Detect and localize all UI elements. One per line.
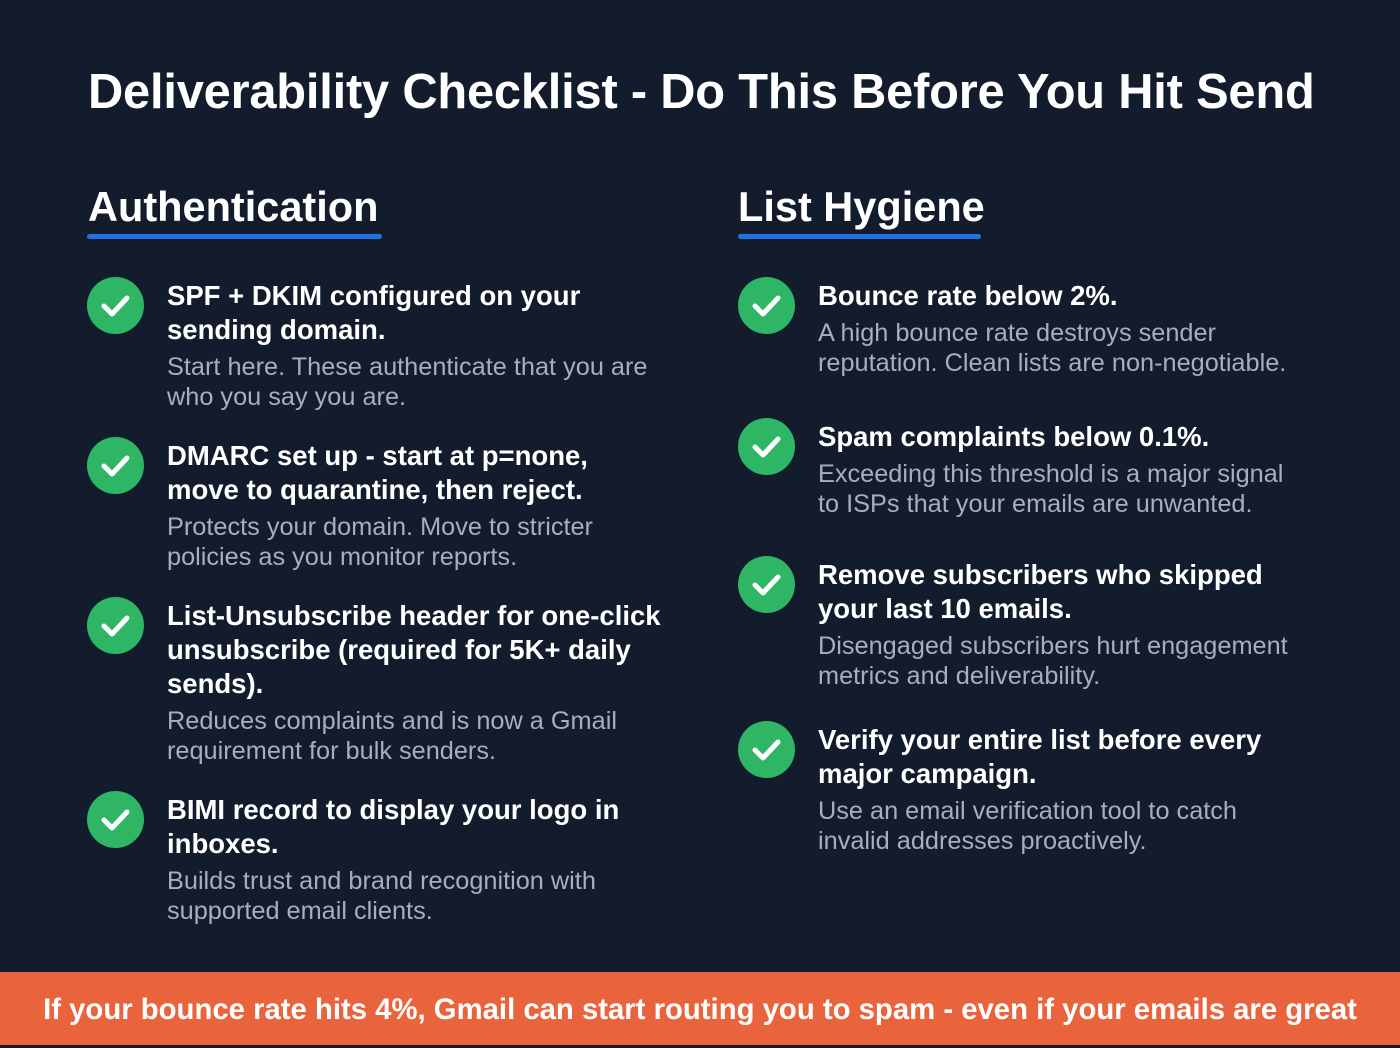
item: remove subscribers: metrics and deliverability. bbox=[818, 662, 1100, 690]
item: bounce rate: reputation. Clean lists are non-negotiable. bbox=[818, 349, 1286, 377]
item: verify list: invalid addresses proactively. bbox=[818, 827, 1147, 855]
item: verify list bbox=[738, 721, 1262, 855]
item: BIMI: inboxes. bbox=[167, 828, 279, 859]
heading: authentication: Authentication bbox=[88, 183, 378, 230]
item: DMARC: policies as you monitor reports. bbox=[167, 543, 517, 571]
item: List-Unsubscribe: Reduces complaints and is now a Gmail bbox=[167, 707, 617, 735]
item: DMARC: Protects your domain. Move to stricter bbox=[167, 513, 593, 541]
item: DMARC: DMARC set up - start at p=none, bbox=[167, 440, 588, 471]
item: bounce rate: Bounce rate below 2%. bbox=[818, 280, 1118, 311]
heading: list hygiene: List Hygiene bbox=[738, 183, 985, 230]
item: List-Unsubscribe: unsubscribe (required for 5K+ daily bbox=[167, 634, 631, 665]
item: verify list: major campaign. bbox=[818, 758, 1037, 789]
item: SPF DKIM: Start here. These authenticate that you are bbox=[167, 353, 647, 381]
item: verify list: Use an email verification tool to catch bbox=[818, 797, 1237, 825]
item: BIMI: Builds trust and brand recognition with bbox=[167, 867, 596, 895]
item: List-Unsubscribe bbox=[87, 597, 661, 765]
item: BIMI: BIMI record to display your logo in bbox=[167, 794, 619, 825]
footer callout bar bbox=[0, 972, 1400, 1045]
item: remove subscribers: your last 10 emails. bbox=[818, 593, 1072, 624]
item: spam complaints: Exceeding this threshold is a major signal bbox=[818, 460, 1283, 488]
title: Deliverability Checklist - Do This Before You Hit Send bbox=[88, 65, 1315, 119]
item: SPF DKIM: sending domain. bbox=[167, 314, 385, 345]
item: DMARC: move to quarantine, then reject. bbox=[167, 474, 583, 505]
item: SPF DKIM: SPF + DKIM configured on your bbox=[167, 280, 580, 311]
item: List-Unsubscribe: sends). bbox=[167, 668, 263, 699]
item: spam complaints bbox=[738, 418, 1283, 518]
item: BIMI bbox=[87, 791, 619, 925]
item: BIMI: supported email clients. bbox=[167, 897, 433, 925]
item: List-Unsubscribe: requirement for bulk senders. bbox=[167, 737, 496, 765]
footer callout bar: If your bounce rate hits 4%, Gmail can start routing you to spam - even if your emails are great bbox=[43, 993, 1357, 1026]
item: SPF DKIM bbox=[87, 277, 647, 411]
item: remove subscribers: Remove subscribers who skipped bbox=[818, 559, 1263, 590]
item: bounce rate bbox=[738, 277, 1286, 377]
item: spam complaints: Spam complaints below 0.1%. bbox=[818, 421, 1209, 452]
item: bounce rate: A high bounce rate destroys sender bbox=[818, 319, 1216, 347]
item: verify list: Verify your entire list before every bbox=[818, 724, 1261, 755]
item: remove subscribers bbox=[738, 556, 1288, 690]
item: spam complaints: to ISPs that your emails are unwanted. bbox=[818, 490, 1252, 518]
item: remove subscribers: Disengaged subscribers hurt engagement bbox=[818, 632, 1288, 660]
item: DMARC bbox=[87, 437, 593, 571]
item: SPF DKIM: who you say you are. bbox=[167, 383, 406, 411]
item: List-Unsubscribe: List-Unsubscribe header for one-click bbox=[167, 600, 661, 631]
